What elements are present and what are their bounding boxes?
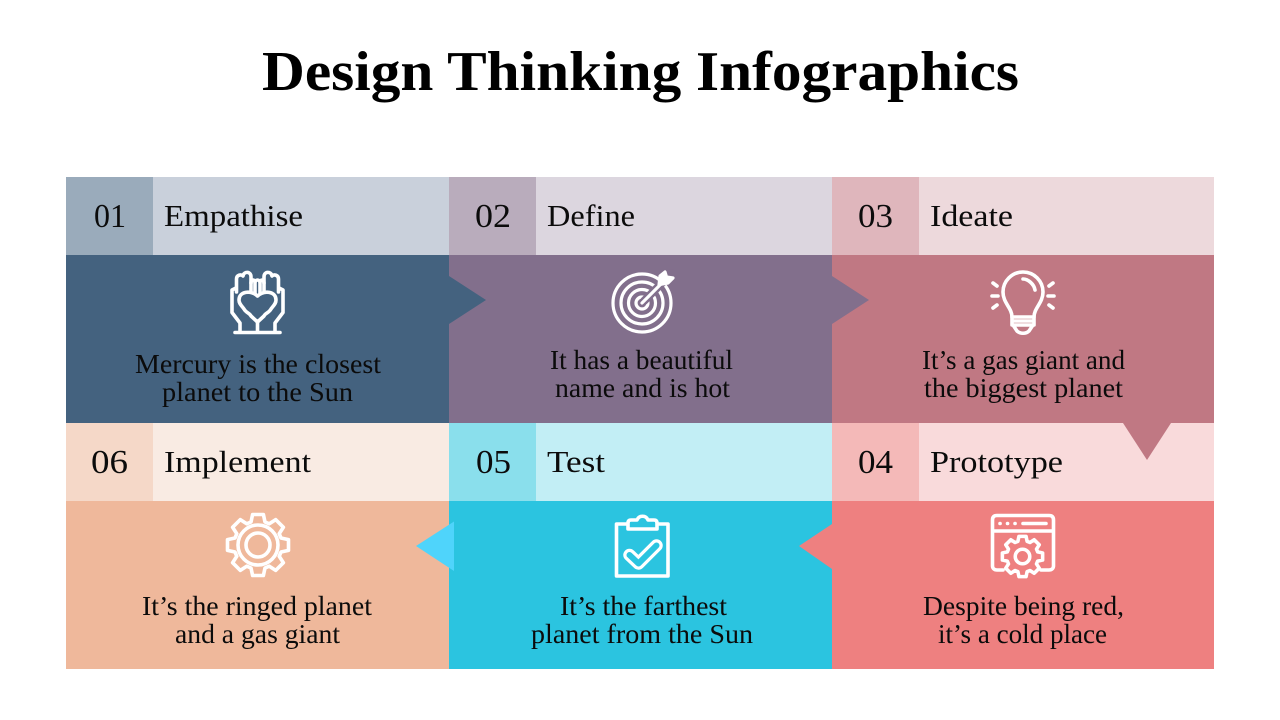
number: 05: 05: [476, 444, 511, 481]
number: 02: 02: [475, 198, 511, 235]
heading: Implement: Implement: [164, 444, 311, 479]
text: Ideate description: [922, 345, 1125, 403]
text: Empathise description: Mercury is the closest: [135, 349, 382, 379]
text: Test description: planet from the Sun: [531, 619, 754, 649]
panel: 01 Empathise: [66, 177, 449, 423]
panel: 03 Ideate: [832, 177, 1214, 423]
title: Design Thinking Infographics: [262, 41, 1019, 103]
icon: browser window with gear: [992, 516, 1054, 577]
panel: 04 Prototype: [832, 423, 1214, 669]
number: 01: 01: [94, 198, 126, 235]
text: Prototype description: Despite being red,: [923, 591, 1124, 621]
heading: Define: Define: [547, 198, 635, 233]
arrow: 04 to 05: [799, 524, 832, 569]
icon: target with arrow: [613, 272, 673, 332]
text: Test description: [531, 591, 754, 649]
number: 06: [66, 423, 153, 501]
number: 05: [449, 423, 536, 501]
text: Implement description: [142, 591, 373, 649]
text: Prototype description: [923, 591, 1124, 649]
text: Implement description: It’s the ringed planet: [142, 591, 373, 621]
arrow: 05 to 06: [416, 522, 454, 571]
arrow: 01 to 02: [449, 276, 486, 324]
number: 03: [832, 177, 919, 255]
text: Ideate description: It’s a gas giant and: [922, 345, 1125, 375]
heading: Prototype: Prototype: [930, 444, 1063, 479]
text: Implement description: and a gas giant: [175, 619, 341, 649]
number: 01: [66, 177, 153, 255]
panel: 05 Test: [449, 423, 832, 669]
icon: light bulb: [992, 272, 1054, 333]
panel: 02 Define: [449, 177, 832, 423]
arrow: 03 to 04: [1123, 423, 1171, 460]
heading: Empathise: Empathise: [164, 198, 303, 233]
icon: hands holding heart: [232, 272, 283, 332]
text: Empathise description: planet to the Sun: [162, 377, 354, 407]
text: Define description: [550, 345, 733, 403]
text: Prototype description: it’s a cold place: [938, 619, 1107, 649]
text: Ideate description: the biggest planet: [924, 373, 1124, 403]
text: Define description: name and is hot: [555, 373, 731, 403]
number: 04: 04: [858, 444, 893, 481]
panel: 06 Implement: [66, 423, 449, 669]
heading: Ideate: Ideate: [930, 198, 1013, 233]
number: 06: 06: [91, 444, 128, 481]
icon: clipboard with check: [616, 516, 668, 576]
number: 04: [832, 423, 919, 501]
heading: Test: Test: [547, 444, 605, 479]
arrow: 02 to 03: [832, 276, 869, 324]
text: Test description: It’s the farthest: [560, 591, 728, 621]
number: 02: [449, 177, 536, 255]
icon: gear: [228, 514, 288, 576]
number: 03: 03: [858, 198, 893, 235]
text: Define description: It has a beautiful: [550, 345, 733, 375]
text: Empathise description: [135, 349, 382, 407]
